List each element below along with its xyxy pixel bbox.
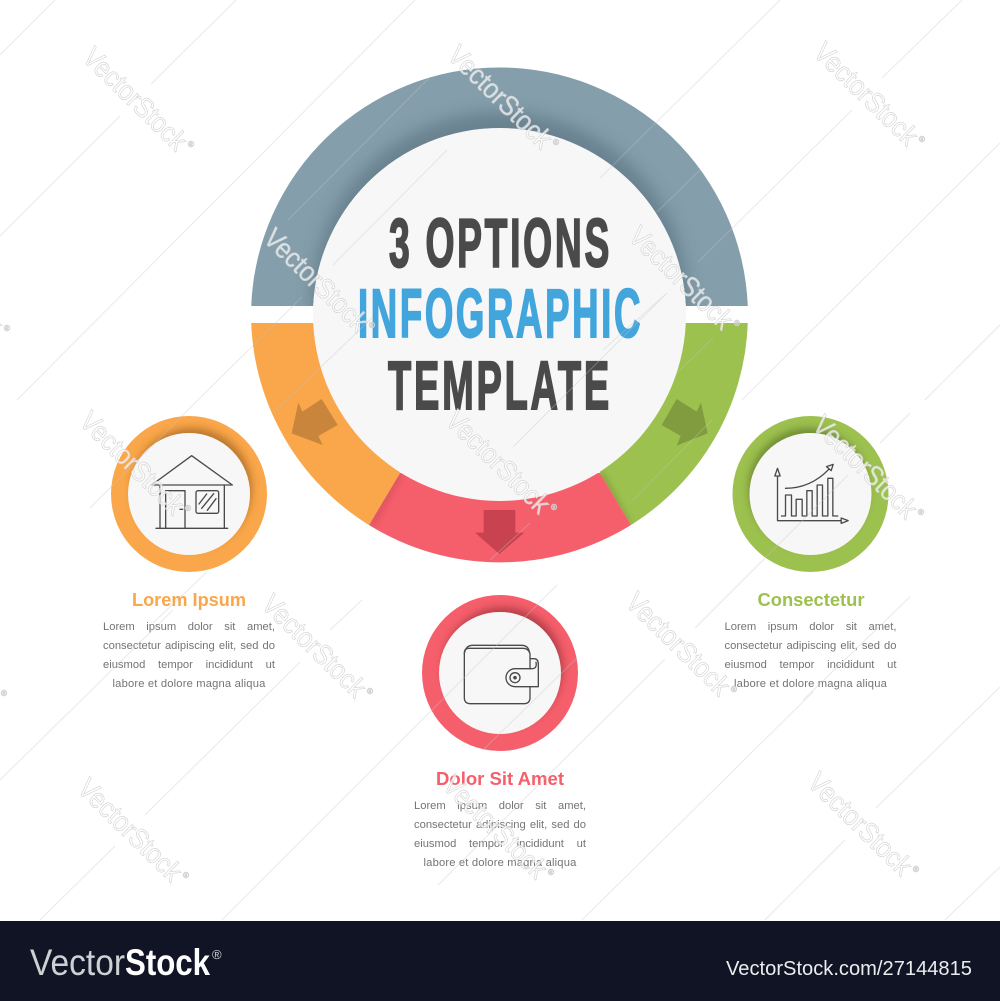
ring: orange bbox=[111, 416, 267, 572]
watermarks: VectorStock bbox=[77, 41, 194, 157]
footer image id: VectorStock.com/27144815 bbox=[726, 957, 972, 980]
arrow: orange segment bbox=[292, 399, 338, 445]
watermarks: VectorStock bbox=[802, 766, 919, 882]
text block: Consectetur description: consectetur adipiscing elit, sed do bbox=[724, 640, 896, 652]
watermarks: VectorStock bbox=[442, 39, 559, 155]
arrow: red segment bbox=[475, 510, 524, 554]
icon: house bbox=[152, 456, 232, 528]
watermarks: ® bbox=[367, 687, 373, 696]
text block: Consectetur description: Lorem ipsum dolor sit amet, bbox=[724, 621, 896, 633]
footer logo: Stock bbox=[125, 942, 210, 983]
text block: Lorem Ipsum description: consectetur adipiscing elit, sed do bbox=[103, 640, 275, 652]
watermarks: ® bbox=[185, 504, 191, 513]
watermarks: VectorStock bbox=[808, 36, 925, 152]
watermarks: VectorStock bbox=[440, 404, 557, 520]
title: TEMPLATE bbox=[388, 347, 612, 424]
text block: Consectetur description: eiusmod tempor incididunt ut bbox=[724, 659, 896, 671]
watermarks: VectorStock bbox=[74, 405, 191, 521]
text block: Lorem Ipsum description: Lorem ipsum dolor sit amet, bbox=[103, 621, 275, 633]
center disc bbox=[313, 128, 686, 501]
watermarks: ® bbox=[919, 135, 925, 144]
footer logo: ® bbox=[212, 947, 222, 962]
footer logo: Vector bbox=[30, 942, 125, 983]
footer logo bbox=[30, 942, 222, 983]
ring: green bbox=[732, 416, 888, 572]
watermarks: VectorStock bbox=[437, 769, 554, 885]
watermarks: ® bbox=[548, 868, 554, 877]
watermarks: ® bbox=[188, 140, 194, 149]
title bbox=[358, 204, 643, 424]
watermarks: ® bbox=[553, 138, 559, 147]
watermarks: VectorStock bbox=[623, 220, 740, 336]
watermarks: ® bbox=[4, 324, 10, 333]
watermarks: ® bbox=[918, 508, 924, 517]
arrow: green segment bbox=[662, 399, 708, 446]
watermarks: ® bbox=[731, 685, 737, 694]
title: INFOGRAPHIC bbox=[358, 275, 643, 352]
watermarks: VectorStock bbox=[258, 222, 375, 338]
segment: orange left arc bbox=[251, 315, 500, 525]
title: 3 OPTIONS bbox=[389, 204, 612, 282]
panel: option Dolor Sit Amet bbox=[414, 595, 586, 869]
text block: Lorem Ipsum description: eiusmod tempor incididunt ut bbox=[103, 659, 275, 671]
segment: green right arc bbox=[500, 315, 748, 525]
panel: central circle diagram bbox=[251, 67, 748, 562]
watermarks: VectorStock bbox=[620, 586, 737, 702]
text block: Dolor Sit Amet description: eiusmod tempor incididunt ut bbox=[414, 838, 586, 850]
watermarks: ® bbox=[1, 689, 7, 698]
watermarks: VectorStock bbox=[807, 409, 924, 525]
text block: Dolor Sit Amet description: consectetur adipiscing elit, sed do bbox=[414, 819, 586, 831]
panel: option Consectetur bbox=[724, 416, 896, 690]
watermarks: ® bbox=[369, 321, 375, 330]
panel: option Lorem Ipsum bbox=[103, 416, 275, 690]
watermarks: ® bbox=[551, 503, 557, 512]
text block: Dolor Sit Amet description: Lorem ipsum dolor sit amet, bbox=[414, 800, 586, 812]
ring: red bbox=[422, 595, 578, 751]
icon: growth chart bbox=[774, 464, 848, 523]
text block: Dolor Sit Amet description: labore et dolore magna aliqua bbox=[424, 857, 576, 869]
watermarks: ® bbox=[183, 871, 189, 880]
footer bar bbox=[0, 921, 1000, 1001]
icon: wallet bbox=[464, 645, 538, 704]
text block: Lorem Ipsum description bbox=[103, 621, 275, 690]
watermarks: VectorStock bbox=[72, 772, 189, 888]
text block: Consectetur description bbox=[724, 621, 896, 690]
text block: Dolor Sit Amet description bbox=[414, 800, 586, 869]
heading: Lorem Ipsum: Lorem Ipsum bbox=[132, 589, 246, 610]
text block: Consectetur description: labore et dolore magna aliqua bbox=[734, 678, 887, 690]
watermarks: ® bbox=[734, 319, 740, 328]
watermarks: VectorStock bbox=[256, 588, 373, 704]
text block: Lorem Ipsum description: labore et dolore magna aliqua bbox=[113, 678, 265, 690]
watermarks: ® bbox=[913, 865, 919, 874]
segment: blue top arc bbox=[251, 68, 748, 306]
heading: Consectetur: Consectetur bbox=[757, 589, 864, 610]
heading: Dolor Sit Amet: Dolor Sit Amet bbox=[436, 768, 564, 789]
segment: red bottom arc bbox=[369, 473, 631, 562]
